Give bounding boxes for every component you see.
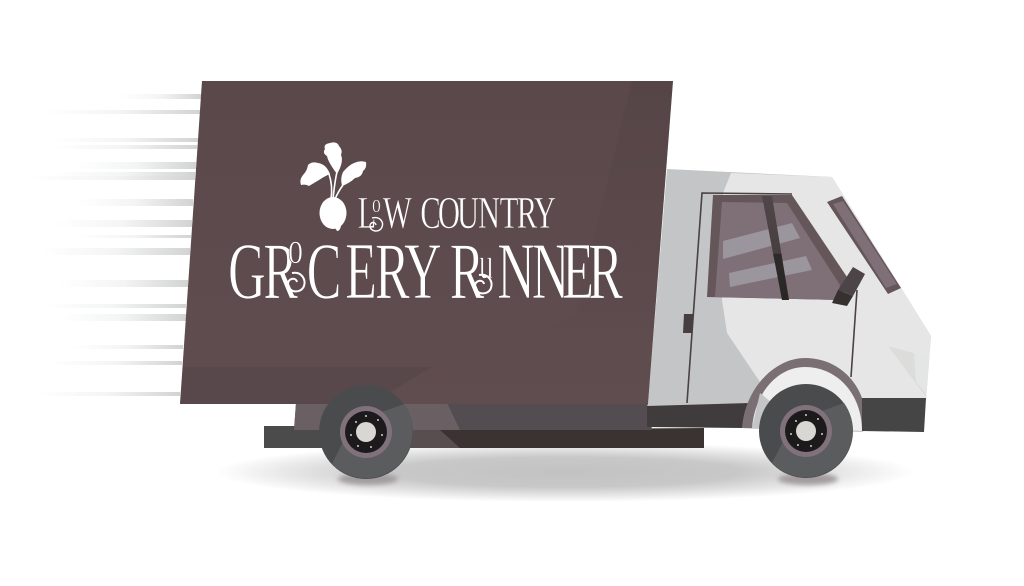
logo bbox=[228, 142, 623, 316]
heading: Grocery Runner: o bbox=[288, 223, 303, 274]
heading: Low Country: O bbox=[438, 189, 460, 239]
heading: Grocery Runner: R bbox=[450, 227, 484, 316]
heading: Grocery Runner: E bbox=[562, 227, 594, 316]
door outline bbox=[687, 193, 857, 403]
ground shadow bbox=[215, 442, 915, 502]
front bumper bbox=[860, 398, 926, 432]
lower cab strip bbox=[647, 403, 750, 428]
heading: Low Country: W bbox=[383, 189, 412, 239]
cargo box bbox=[180, 81, 673, 404]
heading: Grocery Runner: u bbox=[479, 240, 493, 289]
door handle bbox=[683, 314, 693, 333]
truck cab bbox=[647, 169, 931, 432]
heading: Low Country: T bbox=[500, 189, 518, 239]
heading: Low Country: L bbox=[358, 189, 376, 239]
heading: Grocery Runner: Y bbox=[404, 227, 442, 316]
heading: Grocery Runner: R bbox=[375, 227, 410, 316]
heading: Low Country: U bbox=[457, 189, 479, 239]
heading: Grocery Runner: N bbox=[532, 227, 569, 316]
cab highlight bbox=[722, 173, 931, 403]
front wheel arch bbox=[742, 358, 862, 431]
heading: Grocery Runner: C bbox=[307, 227, 341, 316]
heading: Low Country: N bbox=[478, 189, 500, 239]
side window bbox=[707, 195, 847, 300]
heading: Grocery Runner: R bbox=[263, 227, 298, 316]
side mirror bbox=[832, 267, 865, 306]
front wheel bbox=[759, 384, 853, 478]
heading: Low Country: Y bbox=[534, 189, 556, 239]
heading: Low Country: o bbox=[372, 189, 381, 218]
speed lines bbox=[30, 94, 201, 396]
heading: Grocery Runner: G bbox=[228, 227, 266, 316]
heading: Grocery Runner: R bbox=[588, 227, 623, 316]
cab body bbox=[647, 169, 931, 432]
logo swashes bbox=[288, 218, 492, 293]
icon: beet bbox=[300, 142, 366, 231]
rear wheel bbox=[319, 385, 413, 479]
heading: Grocery Runner: N bbox=[497, 227, 535, 316]
windshield bbox=[827, 196, 901, 294]
chassis bbox=[264, 403, 704, 448]
heading: Low Country: C bbox=[420, 189, 441, 239]
heading: Grocery Runner: E bbox=[345, 227, 377, 316]
heading: Low Country: R bbox=[517, 189, 537, 239]
headlight bbox=[888, 346, 928, 397]
